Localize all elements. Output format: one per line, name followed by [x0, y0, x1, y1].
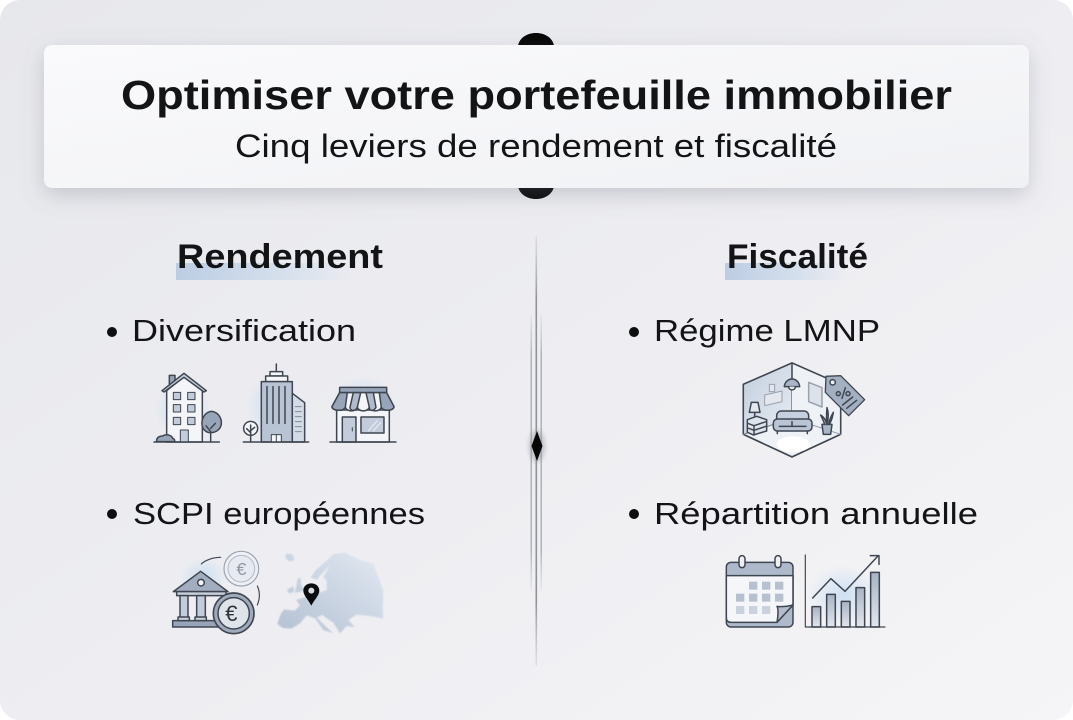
- title card: [44, 45, 1029, 188]
- icon: furnished room with tax tag: [743, 363, 865, 457]
- icon: bank and euro coins: €: [236, 559, 246, 579]
- bullet: Régime LMNP: Régime LMNP: [654, 313, 880, 348]
- subtitle: Cinq leviers de rendement et fiscalité: [235, 128, 837, 164]
- bullet: Diversification: Diversification: [132, 313, 356, 348]
- icon: shop: [330, 375, 397, 442]
- icon: rising bar chart: [805, 555, 885, 627]
- icon: residential building: [153, 373, 221, 442]
- heading: Fiscalité: Fiscalité: [727, 238, 868, 276]
- central divider: [529, 236, 545, 666]
- heading: Rendement: Rendement: [177, 238, 383, 276]
- icon: calendar: [726, 556, 793, 627]
- bullet: SCPI européennes: SCPI européennes: [133, 496, 425, 531]
- icon: map of Europe with pin: [277, 553, 383, 633]
- top black tab: [518, 33, 554, 46]
- title: Optimiser votre portefeuille immobilier: [121, 72, 952, 118]
- bottom black tab: [518, 186, 554, 199]
- bullet: Répartition annuelle: Répartition annuelle: [654, 496, 978, 531]
- icon: bank and euro coins: [173, 551, 259, 634]
- icon: bank and euro coins: €: [225, 601, 237, 626]
- icon: office tower: [243, 364, 309, 442]
